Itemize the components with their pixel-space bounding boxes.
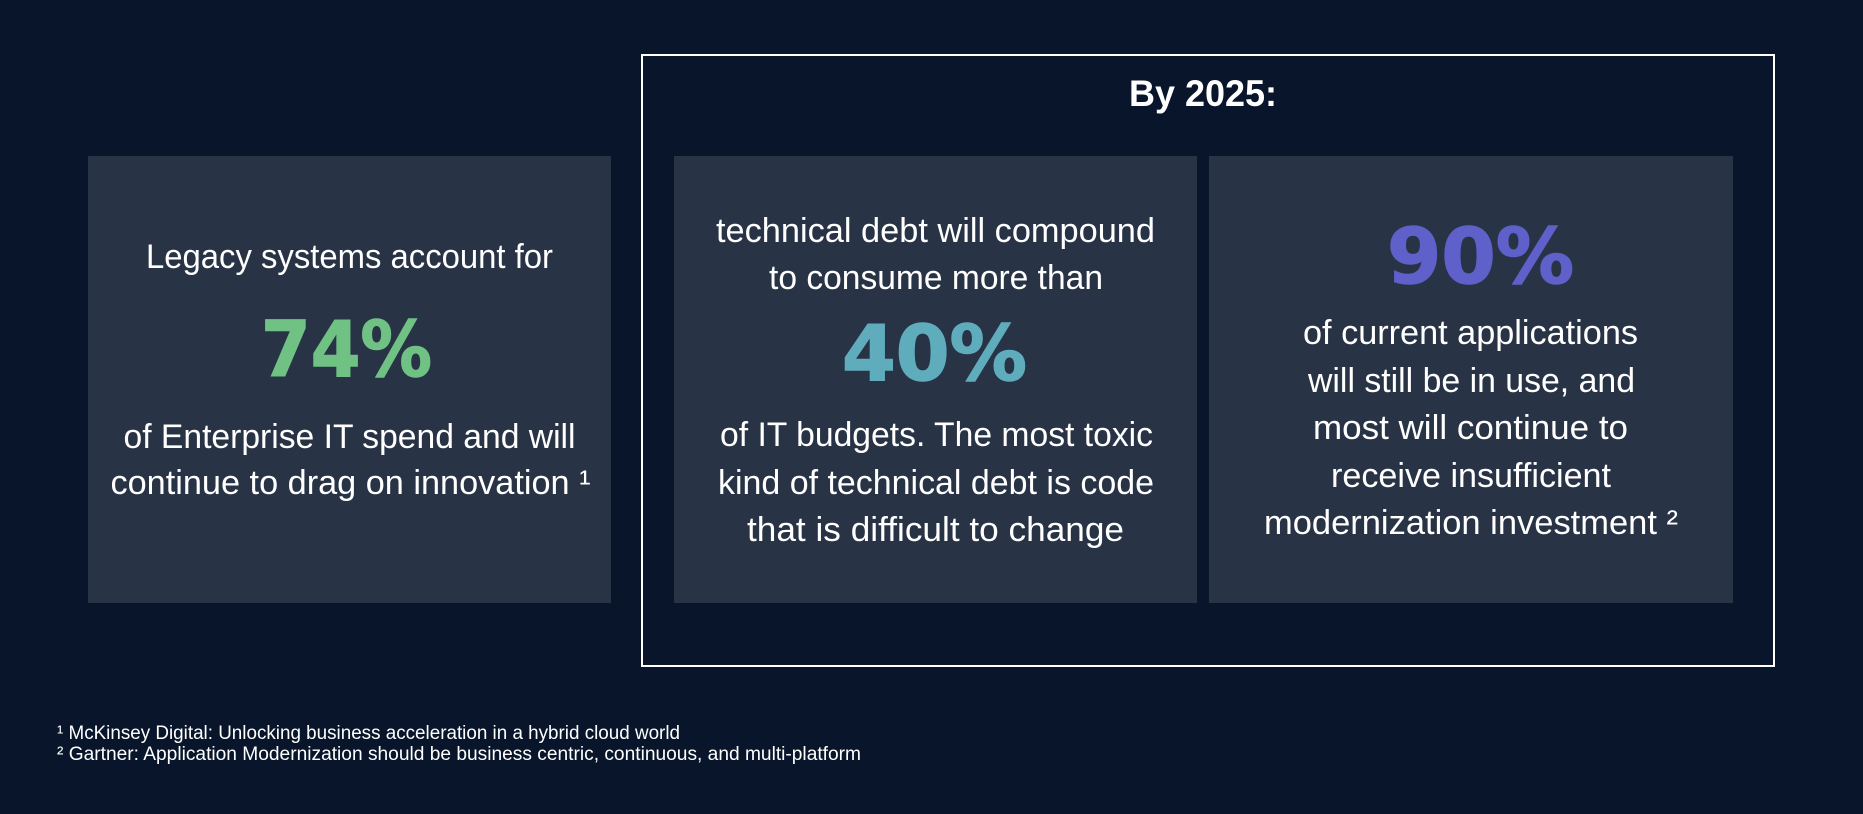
- text: technical debt description: kind of technical debt is code: [718, 464, 1154, 502]
- panel: applications 90%: [1209, 156, 1733, 603]
- text: technical debt description: [718, 416, 1154, 549]
- stat: 90%: 90%: [1387, 213, 1574, 302]
- text: applications description: modernization investment ²: [1264, 504, 1678, 542]
- panel: legacy systems 74%: [88, 156, 611, 603]
- text: technical debt description: that is difficult to change: [747, 511, 1124, 549]
- footnotes: ² Gartner: Application Modernization should be business centric, continuous, and multi-platform: [57, 744, 861, 765]
- footnotes: [57, 723, 861, 765]
- frame: by 2025: [642, 55, 1774, 666]
- text: legacy description: of Enterprise IT spend and will: [124, 418, 576, 456]
- footnotes: ¹ McKinsey Digital: Unlocking business acceleration in a hybrid cloud world: [57, 723, 680, 744]
- text: applications description: most will continue to: [1313, 409, 1628, 447]
- text: applications description: [1264, 314, 1678, 542]
- text: applications description: of current applications: [1303, 314, 1638, 352]
- text: technical debt intro: to consume more than: [769, 259, 1103, 297]
- text: technical debt intro: [716, 212, 1155, 297]
- text: technical debt intro: technical debt will compound: [716, 212, 1155, 250]
- panel: technical debt 40%: [674, 156, 1197, 603]
- text: legacy description: [110, 418, 590, 502]
- text: technical debt description: of IT budgets. The most toxic: [720, 416, 1153, 454]
- text: applications description: receive insufficient: [1331, 457, 1612, 495]
- heading: By 2025: By 2025:: [1129, 73, 1277, 114]
- text: legacy description: continue to drag on innovation ¹: [110, 464, 590, 502]
- stat: 74%: 74%: [261, 306, 432, 395]
- stat: 40%: 40%: [842, 310, 1027, 399]
- text: legacy intro: Legacy systems account for: [146, 238, 553, 276]
- text: applications description: will still be in use, and: [1307, 362, 1635, 400]
